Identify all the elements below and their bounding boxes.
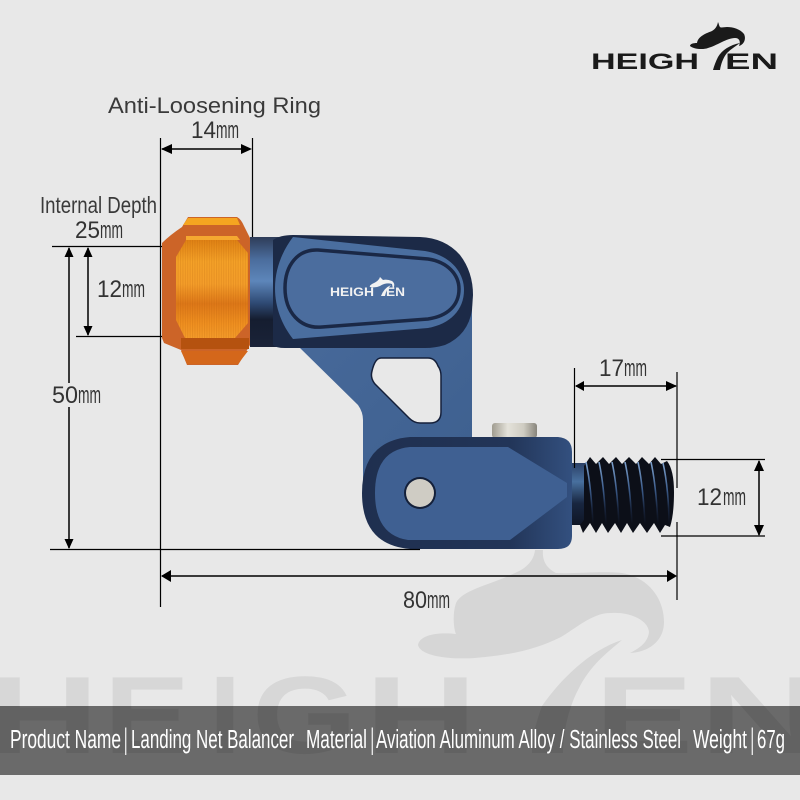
thread neck xyxy=(570,463,588,525)
spec: weight: 67g xyxy=(757,726,785,754)
label: anti-loosening ring: Anti-Loosening Ring xyxy=(108,93,321,118)
triangular cut-out xyxy=(371,358,441,423)
dimension lines xyxy=(50,138,765,607)
arrow: 17mm xyxy=(575,381,677,391)
label: 17mm: mm xyxy=(624,355,647,382)
arrow: 50mm xyxy=(64,247,74,549)
label: 50mm xyxy=(52,382,101,409)
spec: weight: | xyxy=(750,723,754,756)
label: internal depth: Internal Depth xyxy=(40,192,157,218)
lower face xyxy=(375,447,567,540)
spec: product name: Product Name xyxy=(10,726,121,754)
spec banner xyxy=(0,706,800,775)
ring bottom band xyxy=(181,338,249,349)
label: 25mm xyxy=(75,217,123,244)
arrow: 12mm thread xyxy=(754,460,764,536)
watermark logo: N xyxy=(699,654,800,777)
arrow: 12mm internal xyxy=(84,247,92,336)
label: 17mm xyxy=(599,355,647,382)
product: landing net balancer xyxy=(162,217,674,549)
label: 80mm: mm xyxy=(427,587,450,614)
upper housing xyxy=(273,235,473,348)
watermark logo xyxy=(0,550,800,777)
label: 14mm: mm xyxy=(216,117,239,144)
brand logo xyxy=(591,22,778,74)
logo wordmark: HEIGH xyxy=(591,49,699,74)
label: 80mm: 80 xyxy=(403,587,427,614)
knurled face xyxy=(176,240,248,338)
arrow: 14mm xyxy=(161,144,252,154)
watermark logo: E xyxy=(104,654,190,777)
recessed panel xyxy=(285,250,459,327)
engraved logo: HEIGH xyxy=(330,285,374,299)
spec: product name: | xyxy=(124,723,128,756)
label: 12mm thread xyxy=(697,484,746,511)
engraved logo xyxy=(330,277,405,299)
label: 12mm internal: mm xyxy=(122,276,145,303)
spec: product name xyxy=(10,723,294,756)
ring top strip xyxy=(186,236,240,240)
label: 14mm: 14 xyxy=(191,117,216,144)
main plate xyxy=(285,300,480,500)
watermark logo: I xyxy=(209,654,241,777)
engraved logo: EN xyxy=(386,285,405,299)
brand logo: EN xyxy=(725,49,778,74)
ring top facet xyxy=(183,218,240,225)
spec: material: Material xyxy=(306,726,367,754)
label: 12mm internal xyxy=(97,276,145,303)
label: 14mm xyxy=(191,117,239,144)
spec: material xyxy=(306,723,681,756)
spec: product name: Landing Net Balancer xyxy=(131,726,294,754)
watermark logo: E xyxy=(595,654,693,777)
threaded bolt xyxy=(580,457,674,533)
logo dolphin xyxy=(690,22,745,49)
label: 50mm: 50 xyxy=(52,382,78,409)
label: 25mm: 25 xyxy=(75,217,100,244)
label: 25mm: mm xyxy=(100,217,123,244)
arrow: 80mm xyxy=(161,570,677,582)
spec: material: | xyxy=(370,723,374,756)
top screw xyxy=(492,423,537,438)
label: 12mm thread: 12 xyxy=(697,484,722,511)
spec: weight: Weight xyxy=(693,726,747,754)
neck xyxy=(250,237,280,347)
ring bottom facet xyxy=(181,351,248,364)
lower housing xyxy=(362,437,572,549)
anti-loosening ring xyxy=(162,217,250,365)
logo slash xyxy=(713,43,740,70)
watermark logo: H xyxy=(365,654,477,777)
ring body xyxy=(162,217,250,365)
label: 50mm: mm xyxy=(78,382,101,409)
upper bevel face xyxy=(275,237,464,339)
label: 80mm xyxy=(403,587,450,614)
label: 12mm internal: 12 xyxy=(97,276,122,303)
watermark logo: G xyxy=(252,654,357,777)
label: 17mm: 17 xyxy=(599,355,624,382)
pivot pin xyxy=(404,477,436,509)
label: 12mm thread: mm xyxy=(723,484,746,511)
